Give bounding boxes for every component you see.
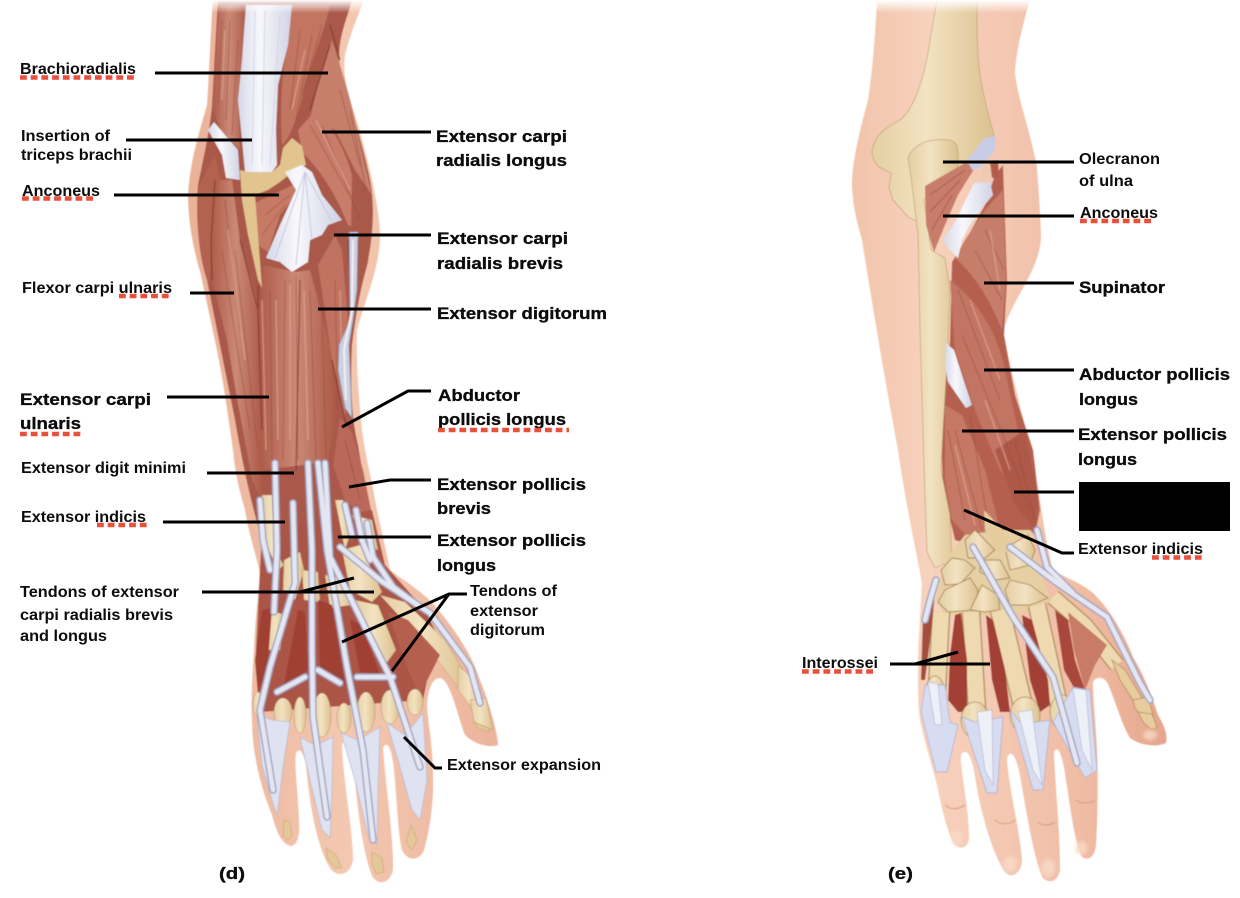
fibres e [948, 230, 1035, 535]
metacarpals e [937, 597, 1117, 710]
label: Insertion of triceps brachii [21, 128, 132, 164]
muscle: brachioradialis [281, 5, 330, 145]
muscle: supinator [955, 190, 1006, 330]
label: Extensor pollicis brevis [437, 475, 586, 518]
label: Extensor carpi ulnaris [20, 390, 151, 434]
label: Extensor pollicis longus e [1078, 425, 1227, 469]
gap at olecranon [981, 162, 990, 180]
muscle: flexor carpi ulnaris [210, 180, 262, 500]
leader lines e [890, 162, 1074, 664]
label: Flexor carpi ulnaris: Flexor carpi ulnaris [22, 280, 172, 297]
muscle: extensor carpi radialis longus [298, 110, 368, 235]
supinator tendon e [943, 182, 993, 258]
label: Olecranon of ulna: of ulna [1079, 173, 1133, 190]
label: (e): (e) [888, 864, 913, 883]
label: Insertion of triceps brachii: Insertion of [21, 128, 111, 145]
carpals and metacarpals d [262, 495, 493, 730]
skin outline d [188, 0, 498, 882]
label: Abductor pollicis longus d [438, 386, 569, 430]
muscle mass d [197, 0, 373, 560]
label: Brachioradialis: Brachioradialis [20, 61, 136, 78]
dark muscle separators d [211, 25, 352, 470]
extensor expansions d [257, 713, 427, 845]
humerus and condyles [872, 0, 994, 225]
top fade [190, 0, 1050, 13]
leader lines d [114, 73, 467, 768]
label: Anconeus e: Anconeus [1080, 205, 1158, 222]
muscle: anconeus [255, 183, 298, 252]
extensor tendons e [925, 530, 1150, 763]
label: Anconeus d: Anconeus [22, 183, 100, 200]
muscle: upper brachioradialis medial [212, 5, 247, 150]
redaction block [1079, 482, 1230, 531]
label: Extensor carpi ulnaris: ulnaris [20, 414, 81, 433]
highlights d [222, 30, 350, 450]
label: Tendons of extensor digitorum [470, 583, 558, 639]
carpal bones e [938, 530, 1048, 612]
label: Supinator: Supinator [1079, 278, 1166, 297]
skin outline e [852, 0, 1167, 881]
label: Tendons of extensor carpi radialis brevis and longus: and longus [20, 628, 107, 645]
label: Extensor pollicis longus d [437, 531, 586, 575]
label: Extensor pollicis longus d: longus [437, 556, 496, 575]
wrist and hand deep layer d [256, 510, 440, 712]
knuckle bones e [924, 676, 1074, 738]
tendon along radial border [338, 232, 358, 418]
label: Extensor indicis d: Extensor indicis [21, 509, 146, 526]
ulna and olecranon d [240, 138, 306, 288]
label: Extensor indicis e: Extensor indicis [1078, 541, 1203, 558]
label: Extensor pollicis longus e: Extensor pollicis [1078, 425, 1227, 444]
label: Abductor pollicis longus e: longus [1079, 390, 1138, 409]
label: Olecranon of ulna: Olecranon [1079, 151, 1160, 168]
label: Tendons of extensor carpi radialis brevis and longus: carpi radialis brevis [20, 607, 173, 624]
finger bones d [283, 722, 490, 874]
extensor tendons d [260, 463, 480, 840]
label: Extensor carpi radialis longus: radialis longus [436, 151, 567, 170]
label: Extensor carpi radialis longus [436, 127, 567, 170]
label: Extensor carpi radialis brevis: radialis brevis [437, 254, 563, 273]
muscle: extensor pollicis longus e [945, 405, 1000, 545]
label: Extensor pollicis longus e: longus [1078, 450, 1137, 469]
label: Abductor pollicis longus d: Abductor [438, 386, 521, 405]
small white aponeurosis e [945, 343, 972, 408]
ulna e [908, 140, 958, 568]
label: Extensor pollicis brevis: Extensor pollicis [437, 475, 586, 494]
interossei e [921, 580, 1107, 712]
knuckle bones d [253, 689, 423, 737]
label: Extensor expansion: Extensor expansion [447, 757, 601, 774]
label: Extensor carpi radialis brevis: Extensor carpi [437, 229, 568, 248]
muscle: extensor digitorum and carpi ulnaris [258, 265, 335, 470]
label: Tendons of extensor digitorum: Tendons of [470, 583, 558, 600]
muscle: abductor pollicis longus e [950, 280, 1020, 490]
panel: posterior forearm and hand (d) [188, 0, 498, 882]
interossei d [255, 600, 440, 695]
highlights e [955, 230, 1010, 525]
muscle: anconeus e [925, 163, 976, 252]
label: Abductor pollicis longus d: pollicis longus [438, 410, 566, 429]
label: Extensor pollicis longus d: Extensor pollicis [437, 531, 586, 550]
carpal base e [936, 530, 1050, 615]
label: Tendons of extensor carpi radialis brevis and longus: Tendons of extensor [20, 584, 179, 601]
label: (d): (d) [219, 864, 245, 883]
tendon top e [967, 136, 996, 170]
label: Tendons of extensor digitorum: digitorum [470, 622, 545, 639]
muscle: extensor pollicis brevis e [995, 430, 1038, 530]
aponeurosis fan [266, 165, 342, 272]
label: Abductor pollicis longus e [1079, 365, 1230, 409]
deep wrist shaft e [984, 510, 1012, 552]
label: Abductor pollicis longus e: Abductor pollicis [1079, 365, 1230, 384]
muscle: abductor pollicis longus [333, 418, 373, 520]
triceps tendon [238, 5, 292, 172]
label: Extensor carpi radialis brevis [437, 229, 568, 273]
thumb phalanges e [1112, 660, 1157, 730]
label: Tendons of extensor carpi radialis brevis and longus [20, 584, 179, 645]
muscle mass e [941, 165, 1040, 550]
label: Tendons of extensor digitorum: extensor [470, 603, 538, 620]
panel: deep forearm and hand (e) [852, 0, 1167, 881]
finger creases e [945, 800, 1095, 825]
fibres d [218, 20, 366, 500]
label: Olecranon of ulna [1079, 151, 1160, 190]
label: Extensor pollicis brevis: brevis [437, 499, 491, 518]
label: Extensor digitorum: Extensor digitorum [437, 304, 607, 323]
label: Insertion of triceps brachii: triceps brachii [21, 147, 132, 164]
extensor expansions e [921, 685, 1097, 793]
label: Extensor digit minimi: Extensor digit minimi [21, 460, 186, 477]
fingertip highlights e [951, 730, 1157, 877]
lateral white tendon [208, 122, 240, 180]
label: Extensor carpi ulnaris: Extensor carpi [20, 390, 151, 409]
label: Interossei: Interossei [802, 655, 878, 672]
label: Extensor carpi radialis longus: Extensor carpi [436, 127, 567, 146]
